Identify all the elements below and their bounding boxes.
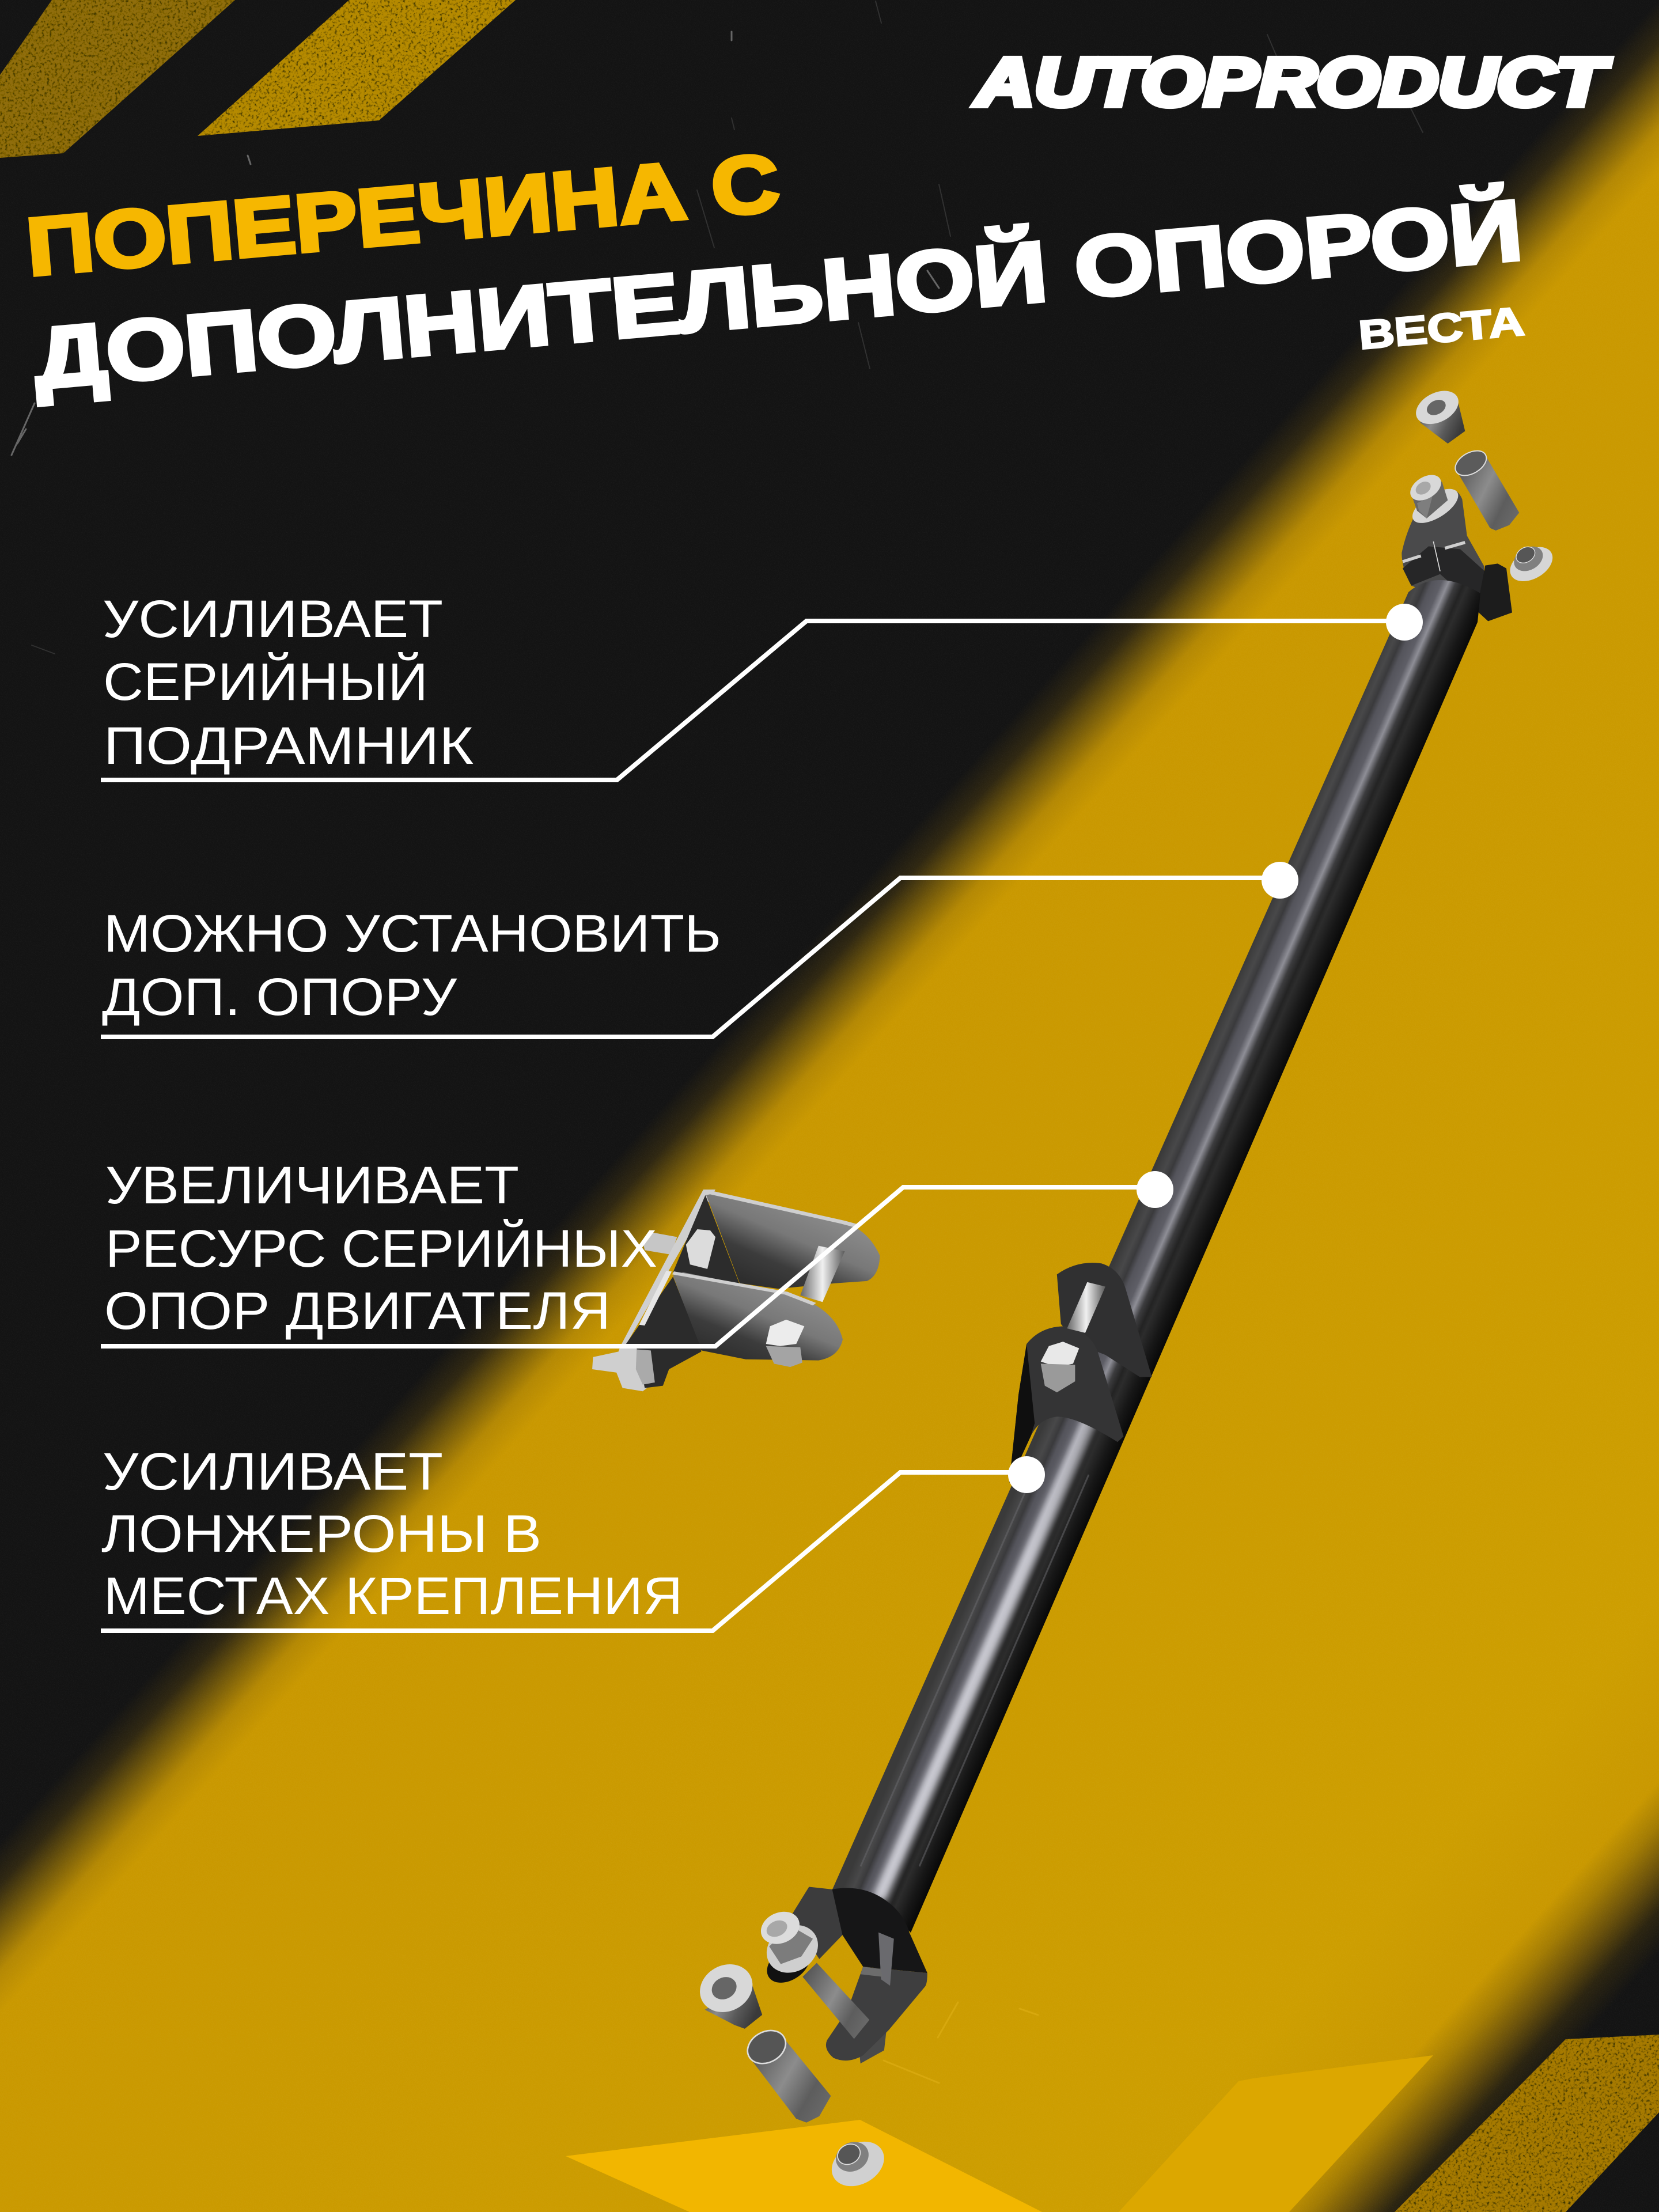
hazard stripes: bottom right dark corner [1395, 2035, 1659, 2212]
callout 1: text [103, 590, 474, 775]
lower nut and bolt [766, 1320, 804, 1367]
hazard stripes: top left [0, 0, 516, 158]
bolt tail [858, 2033, 886, 2063]
loose support bracket [592, 1190, 880, 1391]
mid bracket front plate [1009, 1326, 1124, 1483]
bottom sleeve [741, 2024, 831, 2123]
callout 4: text: УСИЛИВАЕТ [103, 1442, 443, 1501]
bottom clamp bracket [691, 1887, 927, 2195]
mid bracket and loose support [592, 1190, 1152, 1483]
callout 2: text: ДОП. ОПОРУ [102, 968, 457, 1027]
hazard stripes: bottom centre bright [566, 2120, 1042, 2212]
top sleeve [1451, 446, 1519, 531]
top hardware [1406, 384, 1559, 588]
top washer and nut [1406, 469, 1464, 530]
callout 1: leader line [101, 621, 1404, 780]
tube grooves [861, 1475, 1089, 1866]
callout 3: text: ОПОР ДВИГАТЕЛЯ [104, 1282, 611, 1340]
upper pin stub [643, 1233, 677, 1255]
lower arm [826, 1967, 927, 2061]
callout 4: text: ЛОНЖЕРОНЫ В [101, 1505, 541, 1563]
callout 3: dot [1137, 1171, 1173, 1208]
connecting bolt [800, 1246, 844, 1302]
upper gusset [706, 1193, 880, 1289]
top bushing small [1504, 540, 1559, 588]
upper gusset dark face [673, 1195, 740, 1285]
callout 3: leader line [101, 1187, 1155, 1346]
mid bracket rear plate [1057, 1263, 1152, 1377]
bottom bushing flanged [691, 1955, 762, 2029]
upper arm [791, 1887, 861, 1959]
plate slot [642, 1271, 669, 1325]
title line 1: ПОПЕРЕЧИНА С [23, 137, 783, 293]
product: crossbar assembly [592, 384, 1559, 2195]
title line 2: ДОПОЛНИТЕЛЬНОЙ ОПОРОЙ [30, 181, 1526, 407]
callout 3: text: РЕСУРС СЕРИЙНЫХ [105, 1218, 657, 1278]
title [23, 137, 1526, 407]
mid bracket pin [1067, 1282, 1105, 1333]
callout 3: text [104, 1156, 657, 1340]
centre dark [832, 1888, 927, 1973]
logo: AUTOPRODUCT: AUTOPRODUCT [974, 44, 1611, 120]
back plate edge [592, 1190, 715, 1391]
callout 1: text: УСИЛИВАЕТ [103, 590, 443, 649]
callout 2: leader line [101, 878, 1280, 1037]
lower gusset [673, 1272, 843, 1361]
bottom hex [636, 1350, 655, 1385]
tube highlight [872, 1417, 1096, 1901]
subtitle: ВЕСТА [1357, 298, 1526, 358]
side band [861, 1967, 882, 1977]
hazard stripes: bottom right translucent [1119, 2055, 1433, 2212]
mid bracket dark edge [1009, 1344, 1035, 1483]
callout 2: dot [1262, 862, 1298, 899]
top clamp bracket [1402, 490, 1512, 621]
upper nut [686, 1229, 715, 1269]
callout 4: dot [1008, 1456, 1045, 1493]
callout 2: text: МОЖНО УСТАНОВИТЬ [104, 904, 721, 963]
nut and washer [756, 1906, 827, 1990]
mid bracket nut [1041, 1342, 1079, 1392]
callout 3: text: УВЕЛИЧИВАЕТ [105, 1156, 519, 1215]
lower gusset rim [673, 1273, 815, 1304]
tube [832, 580, 1480, 1933]
rod [802, 1963, 869, 2039]
lower gusset dark face [624, 1277, 701, 1388]
callout 4: leader line [101, 1472, 1027, 1631]
callout 4: text [101, 1442, 683, 1626]
upper gusset rim [705, 1191, 857, 1226]
top bushing flanged [1410, 384, 1465, 444]
callout 1: text: СЕРИЙНЫЙ [103, 652, 428, 711]
callout 1: dot [1386, 604, 1423, 641]
bottom bushing small [824, 2133, 892, 2195]
callout 2: text [102, 904, 721, 1027]
centre glint [878, 1933, 894, 1986]
callout 4: text: МЕСТАХ КРЕПЛЕНИЯ [104, 1567, 683, 1626]
callout 1: text: ПОДРАМНИК [104, 717, 474, 775]
